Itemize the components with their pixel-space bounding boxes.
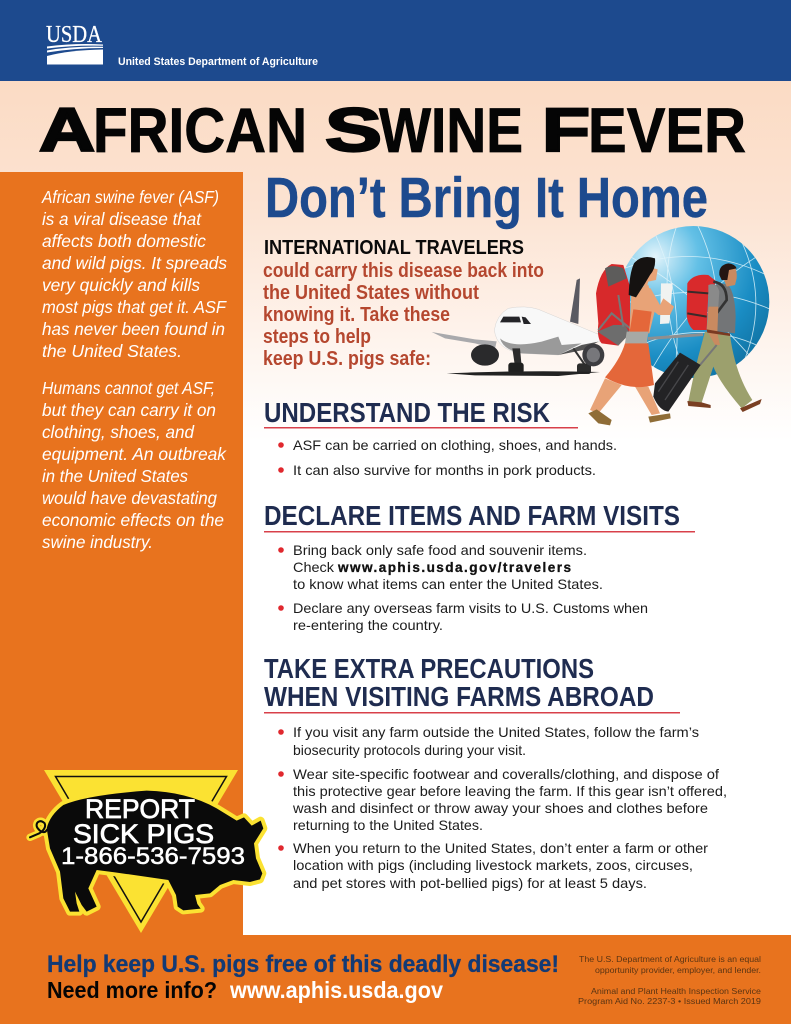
bullets: Bring back only safe food and souvenir items. <box>293 543 587 558</box>
section: take extra precautions <box>264 653 727 891</box>
sidebar text: about ASF: African swine fever (ASF) <box>41 187 219 207</box>
bullets: ASF can be carried on clothing, shoes, and hands. <box>293 438 617 453</box>
intro text: the United States without <box>263 282 479 304</box>
bullets <box>278 725 727 891</box>
icon: globe <box>617 223 772 380</box>
footer fine print: Animal and Plant Health Inspection Service <box>591 986 761 996</box>
bullets: When you return to the United States, don’t enter a farm or other <box>293 841 708 856</box>
badge text: 1-866-536-7593 <box>61 843 245 870</box>
header band <box>0 0 791 81</box>
bullets: It can also survive for months in pork products. <box>293 463 596 478</box>
intro text: steps to help <box>263 326 371 348</box>
sidebar text: about ASF: is a viral disease that <box>42 209 202 229</box>
wing behind travelers <box>648 333 703 340</box>
sidebar text: about ASF: and wild pigs. It spreads <box>42 253 227 273</box>
bullets: returning to the United States. <box>293 818 483 833</box>
intro text: could carry this disease back into <box>263 260 544 282</box>
footer fine print <box>578 954 761 1006</box>
page background <box>0 81 791 441</box>
footer call to action: Need more info? <box>47 977 217 1003</box>
sidebar text: human carriers: economic effects on the <box>42 510 224 530</box>
intro: international travelers: INTERNATIONAL TRAVELERS <box>264 237 524 259</box>
title <box>39 96 746 166</box>
bullets: re-entering the country. <box>293 618 443 633</box>
intro text: knowing it. Take these <box>263 304 450 326</box>
heading: DECLARE ITEMS AND FARM VISITS <box>264 500 680 531</box>
icon: suitcase <box>653 345 717 412</box>
heading <box>264 653 654 712</box>
sidebar text: human carriers: but they can carry it on <box>42 400 216 420</box>
sidebar text: human carriers: would have devastating <box>42 488 217 508</box>
sidebar text: human carriers: clothing, shoes, and <box>42 422 195 442</box>
footer call to action <box>47 951 559 1003</box>
footer call to action: www.aphis.usda.gov <box>229 977 443 1003</box>
footer fine print: opportunity provider, employer, and lender. <box>595 965 761 975</box>
department name: United States Department of Agriculture <box>118 56 318 68</box>
badge text <box>61 794 245 870</box>
bullets: to know what items can enter the United States. <box>293 577 603 592</box>
sidebar text: about ASF: has never been found in <box>42 319 225 339</box>
icon: warning triangle <box>44 770 238 933</box>
badge text: SICK PIGS <box>73 819 214 849</box>
badge text: REPORT <box>85 794 195 824</box>
bullets: Wear site-specific footwear and coveralls/clothing, and dispose of <box>293 767 719 782</box>
footer fine print: Program Aid No. 2237-3 • Issued March 2019 <box>578 996 761 1006</box>
section: declare items and farm visits <box>264 500 695 633</box>
bullets: this protective gear before leaving the farm. If this gear isn’t offered, <box>293 784 727 799</box>
sidebar text: about ASF: affects both domestic <box>42 231 206 251</box>
title: S <box>325 96 382 164</box>
sidebar text: human carriers: in the United States <box>42 466 188 486</box>
heading: TAKE EXTRA PRECAUTIONS <box>264 653 594 684</box>
sidebar text: human carriers: equipment. An outbreak <box>42 444 227 464</box>
icon: man traveler <box>687 263 762 412</box>
footer call to action: Help keep U.S. pigs free of this deadly disease! <box>47 951 559 978</box>
bullets: wash and disinfect or throw away your shoes and clothes before <box>292 801 708 816</box>
title: FRICAN <box>93 96 307 166</box>
panel: orange sidebar <box>0 172 243 935</box>
sidebar text: about ASF: very quickly and kills <box>42 275 200 295</box>
intro text <box>263 260 544 370</box>
icon: airplane <box>432 278 605 376</box>
bullets: www.aphis.usda.gov/travelers <box>337 560 571 575</box>
footer band <box>0 935 791 1024</box>
bullets <box>278 543 648 633</box>
report sick pigs badge <box>30 770 263 933</box>
heading: UNDERSTAND THE RISK <box>264 397 550 428</box>
icon: woman traveler <box>588 257 674 425</box>
bullets: location with pigs (including livestock markets, zoos, circuses, <box>293 858 693 873</box>
USDA logo: USDA <box>46 22 103 48</box>
sidebar text: about ASF: the United States. <box>42 341 182 361</box>
bullets: Declare any overseas farm visits to U.S. Customs when <box>293 601 648 616</box>
bullets: Check <box>293 560 334 575</box>
subtitle: Don’t Bring It Home <box>265 166 708 230</box>
title: WINE <box>379 96 523 166</box>
sidebar text: human carriers <box>42 378 227 552</box>
bullets: If you visit any farm outside the United States, follow the farm’s <box>293 725 699 740</box>
sidebar text: human carriers: Humans cannot get ASF, <box>42 378 215 398</box>
footer fine print: The U.S. Department of Agriculture is an equal <box>579 954 761 964</box>
heading: WHEN VISITING FARMS ABROAD <box>264 681 654 712</box>
title: A <box>39 96 95 164</box>
icon: pig silhouette <box>30 791 263 912</box>
bullets: biosecurity protocols during your visit. <box>293 743 526 758</box>
bullets: and pet stores with pot-bellied pigs) for at least 5 days. <box>293 876 647 891</box>
title: F <box>542 96 590 164</box>
sidebar text: about ASF: most pigs that get it. ASF <box>42 297 227 317</box>
intro text: keep U.S. pigs safe: <box>263 348 431 370</box>
title: EVER <box>588 96 746 166</box>
sidebar text: human carriers: swine industry. <box>42 532 153 552</box>
section: understand the risk <box>264 397 617 478</box>
sidebar text: about ASF <box>41 187 227 361</box>
illustration: travelers, plane and globe <box>432 223 772 425</box>
bullets <box>278 438 617 478</box>
USDA logo <box>46 22 103 64</box>
